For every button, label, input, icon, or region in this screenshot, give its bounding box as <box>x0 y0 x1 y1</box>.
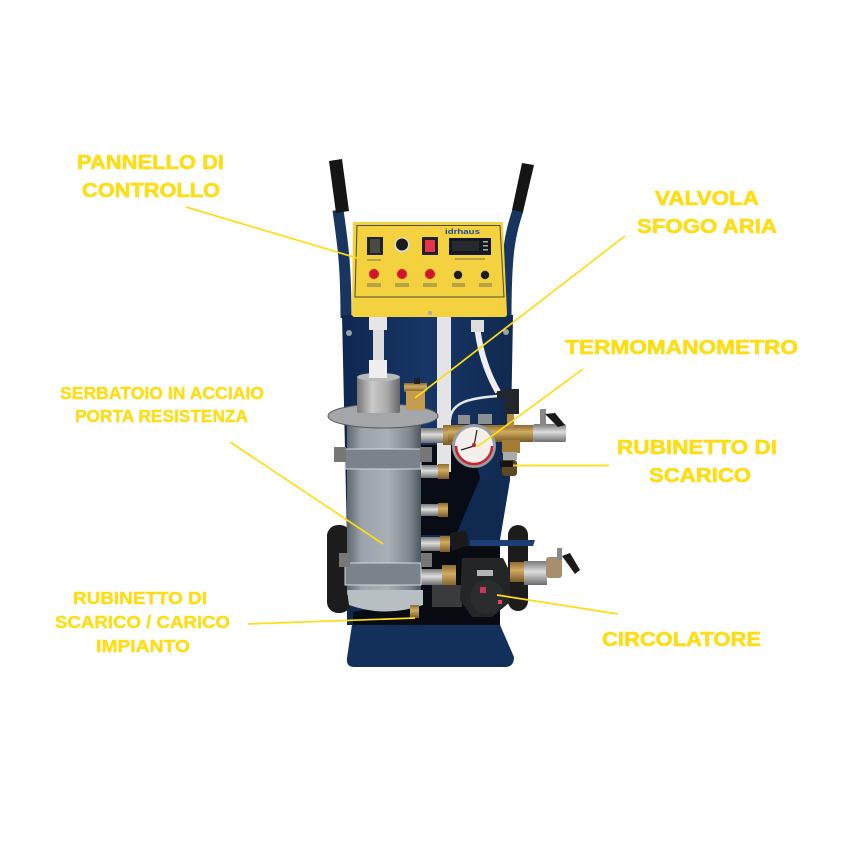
label: valvola sfogo aria: VALVOLA <box>655 188 759 210</box>
shelf <box>470 540 535 546</box>
ball valve <box>533 424 566 442</box>
red switch <box>422 237 438 255</box>
label: rubinetto di scarico / carico impianto <box>55 588 230 656</box>
label: rubinetto di scarico <box>617 437 777 487</box>
label: rubinetto di scarico / carico impianto: SCARICO / CARICO <box>55 612 230 632</box>
bottom drain tap <box>410 605 419 618</box>
back plate <box>342 315 513 540</box>
selector switch <box>367 237 383 255</box>
flange <box>328 404 438 428</box>
label: pannello di controllo <box>77 152 224 202</box>
label: pannello di controllo: CONTROLLO <box>82 180 220 202</box>
white pipes and hoses <box>369 317 498 472</box>
label: rubinetto di scarico: RUBINETTO DI <box>617 437 777 459</box>
wheels <box>327 525 528 613</box>
leader line: rubinetto di scarico <box>513 464 609 466</box>
leader line: valvola sfogo aria <box>415 236 625 398</box>
steel tank <box>328 360 438 612</box>
leader line: serbatoio <box>230 442 383 544</box>
machine photo: hydraulic trolley <box>327 159 580 667</box>
label: serbatoio in acciaio: SERBATOIO IN ACCIAIO <box>60 383 264 403</box>
left handle <box>329 159 349 318</box>
thermo-manometer gauge <box>452 414 496 468</box>
label: rubinetto di scarico / carico impianto: IMPIANTO <box>96 636 190 656</box>
dark area under pump <box>353 546 500 625</box>
black elbow connector <box>497 389 519 414</box>
leader line: pannello di controllo <box>186 207 357 258</box>
side fittings on tank <box>420 425 469 587</box>
black buttons <box>454 271 489 279</box>
dark shadow behind pipes <box>421 445 480 535</box>
label: termomanometro: TERMOMANOMETRO <box>565 337 798 359</box>
control panel <box>352 222 507 317</box>
label: serbatoio in acciaio <box>60 383 264 426</box>
plate bolts <box>346 329 509 336</box>
label: valvola sfogo aria <box>637 188 777 238</box>
top cap <box>357 377 400 413</box>
thermostat display <box>449 238 491 255</box>
air vent valve <box>404 378 427 410</box>
label: pannello di controllo: PANNELLO DI <box>77 152 224 174</box>
brass manifold <box>448 409 566 476</box>
clamps <box>345 449 421 469</box>
logo: idrhaus <box>445 227 480 236</box>
leader line: circolatore <box>497 595 618 614</box>
label: rubinetto di scarico / carico impianto: RUBINETTO DI <box>73 588 207 608</box>
leader line: termomanometro <box>477 369 583 447</box>
label: circolatore: CIRCOLATORE <box>602 629 761 651</box>
leader line: rubinetto carico impianto <box>248 618 415 624</box>
base plate <box>347 618 514 667</box>
circulator pump <box>432 558 510 617</box>
lower ball valve <box>510 548 580 585</box>
label: serbatoio in acciaio: PORTA RESISTENZA <box>75 406 248 426</box>
label: valvola sfogo aria: SFOGO ARIA <box>637 216 777 238</box>
right handle <box>506 163 534 318</box>
red buttons <box>369 269 435 279</box>
label: rubinetto di scarico: SCARICO <box>649 465 751 487</box>
knob <box>394 238 410 252</box>
